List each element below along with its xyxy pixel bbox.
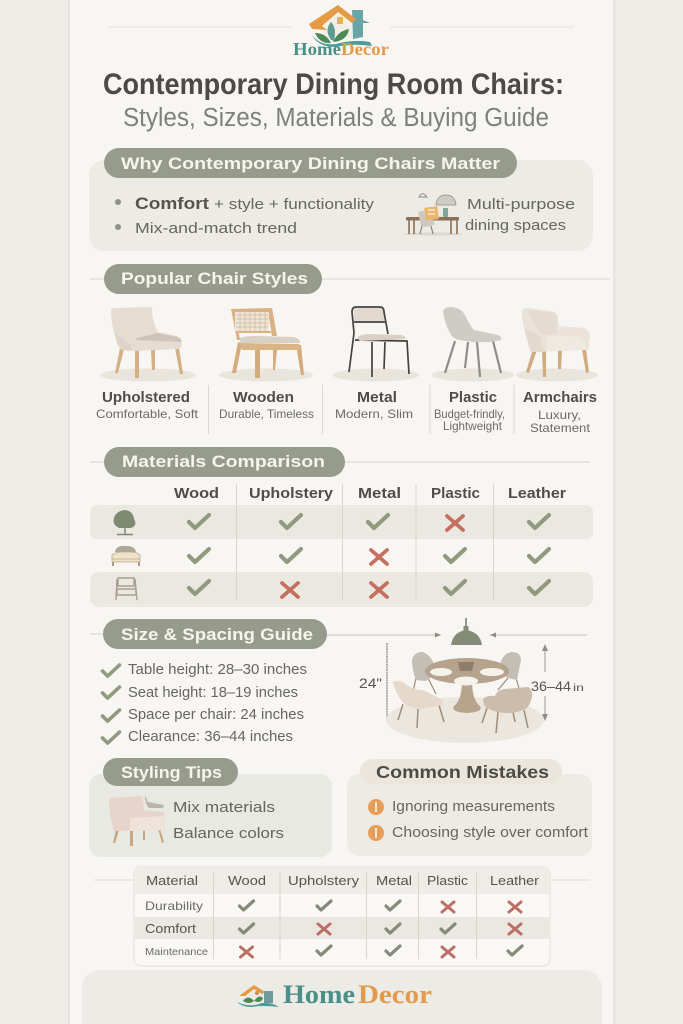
style labels: Upholstered	[102, 389, 190, 406]
footer logo wordmark	[283, 980, 432, 1009]
header logo	[108, 5, 574, 59]
table header: Wood	[174, 485, 219, 502]
bullet: mix and match: Mix-and-match trend	[135, 221, 297, 237]
text: multi-purpose dining spaces: dining spaces	[465, 218, 566, 234]
table header: Leather	[508, 485, 566, 502]
row: comfort	[145, 922, 521, 936]
style labels: Metal	[357, 389, 397, 406]
row: maintenance: Maintenance	[145, 946, 208, 958]
icon: pendant lamp	[451, 618, 482, 645]
row: durability	[145, 899, 521, 913]
heading: popular chair styles: Popular Chair Styles	[121, 269, 308, 288]
title: Contemporary Dining Room Chairs:	[103, 68, 564, 101]
tips text: Balance colors	[173, 826, 284, 842]
footer logo wordmark: Home	[283, 980, 355, 1009]
style labels: Modern, Slim	[335, 407, 413, 421]
heading: popular chair styles	[104, 264, 322, 294]
table header: Metal	[358, 485, 401, 502]
table header: Upholstery	[249, 485, 334, 502]
checklist	[102, 662, 307, 745]
checklist: Seat height: 18–19 inches	[128, 685, 298, 701]
style labels: Lightweight	[443, 419, 503, 433]
row: upholstery icon marks	[189, 549, 549, 564]
front chairs	[393, 681, 532, 733]
footer	[82, 970, 602, 1024]
table header row: Wood	[228, 874, 266, 888]
row: comfort: Comfort	[145, 922, 197, 936]
text: multi-purpose dining spaces: Multi-purpose	[467, 197, 575, 213]
style labels: Wooden	[233, 389, 294, 406]
header logo: Decor	[341, 39, 389, 59]
tips text: Mix materials	[173, 800, 275, 816]
arrows and dimensions: 36–44	[531, 679, 572, 694]
style labels: Budget-frindly,	[434, 407, 505, 421]
style labels: Luxury,	[538, 408, 581, 422]
rug	[386, 697, 544, 743]
footer logo wordmark: Decor	[358, 980, 432, 1009]
table	[425, 658, 509, 713]
row bands	[90, 505, 593, 607]
table header row	[146, 874, 539, 888]
table header row: Leather	[490, 874, 539, 888]
row: durability: Durability	[145, 899, 203, 913]
heading: materials comparison: Materials Comparison	[122, 452, 325, 471]
text: multi-purpose dining spaces	[465, 197, 575, 234]
heading: materials comparison	[104, 447, 345, 477]
header logo: Home	[293, 39, 341, 59]
arrows and dimensions	[327, 632, 587, 722]
arrows and dimensions: in	[573, 683, 584, 694]
diagram: dining table spacing	[327, 618, 587, 743]
heading: why chairs matter	[104, 148, 517, 178]
bullet: comfort	[115, 194, 375, 213]
icon: armchair	[109, 795, 165, 846]
heading: styling tips	[103, 758, 238, 786]
mistake: ignoring measurements: Ignoring measurements	[392, 799, 555, 815]
style labels: Durable, Timeless	[219, 407, 314, 421]
bullet: comfort: Comfort	[135, 194, 209, 213]
mistake: style over comfort: Choosing style over comfort	[392, 825, 588, 841]
style labels: Statement	[530, 421, 591, 435]
heading: common mistakes	[360, 759, 562, 784]
style labels: Plastic	[449, 389, 497, 406]
chair: upholstered	[100, 307, 196, 382]
icon: desk with lamp and chair	[403, 194, 463, 236]
heading: size and spacing guide: Size & Spacing Guide	[121, 625, 313, 644]
section: size and spacing guide	[90, 618, 587, 745]
tips text	[173, 800, 284, 842]
table header row: Metal	[376, 874, 412, 888]
panel: styling tips	[89, 758, 332, 857]
table header row: Plastic	[427, 874, 468, 888]
bullet: comfort: + style + functionality	[214, 197, 375, 213]
style labels: Comfortable, Soft	[96, 407, 199, 421]
heading: size and spacing guide	[103, 619, 327, 649]
chair: wooden	[219, 308, 313, 382]
icon: upholstered bench	[112, 546, 140, 566]
checklist: Space per chair: 24 inches	[128, 707, 304, 723]
arrows and dimensions: 24"	[359, 676, 382, 691]
heading: styling tips: Styling Tips	[121, 763, 222, 782]
row: wood icon marks	[189, 515, 549, 530]
checklist: Table height: 28–30 inches	[128, 662, 307, 678]
section: popular chair styles	[90, 264, 610, 435]
logo icon: house and leaves	[309, 5, 372, 47]
style labels	[96, 385, 597, 435]
panel: why contemporary dining chairs matter	[89, 148, 593, 251]
table header	[174, 485, 566, 502]
back chairs	[412, 652, 521, 694]
icon: tree	[114, 510, 135, 534]
table header row: Upholstery	[288, 874, 360, 888]
icon: stool frame	[116, 578, 137, 600]
paper card	[69, 0, 614, 1024]
table header row: Material	[146, 874, 198, 888]
row: frame icon marks	[189, 581, 549, 597]
panel: common mistakes	[347, 759, 592, 856]
heading: common mistakes: Common Mistakes	[376, 762, 549, 782]
footer logo icon	[237, 985, 279, 1007]
checklist: Clearance: 36–44 inches	[128, 729, 293, 745]
chair: armchair	[516, 308, 598, 382]
style labels: Armchairs	[523, 389, 597, 406]
chair: metal	[333, 307, 419, 382]
bottom comparison table	[94, 867, 590, 966]
row: maintenance	[145, 946, 522, 958]
section: materials comparison	[90, 447, 593, 607]
table header: Plastic	[431, 485, 480, 502]
heading: why chairs matter: Why Contemporary Dining Chairs Matter	[121, 154, 500, 173]
chair: plastic	[432, 307, 514, 382]
subtitle: Styles, Sizes, Materials & Buying Guide	[123, 104, 549, 132]
